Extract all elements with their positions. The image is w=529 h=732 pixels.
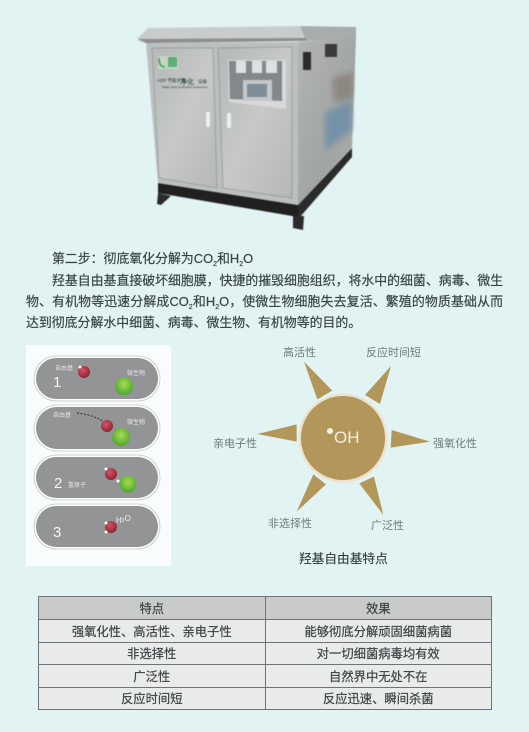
- step 1 pill: 微生物: [127, 369, 145, 377]
- chart: hydroxyl radical sun diagram: [213, 345, 477, 566]
- paragraph: hydroxyl radical action: 物、有机物等迅速分解成CO2和H2O，使微生物细胞失去复活、繁殖的物质基础从而: [26, 294, 503, 311]
- heading: step two: 第二步：彻底氧化分解为CO2和H2O: [52, 251, 253, 268]
- table: characteristics and effects: 强氧化性、高活性、亲电子性: [72, 625, 232, 639]
- ray labels: 广泛性: [371, 518, 404, 532]
- ray labels: 反应时间短: [366, 345, 421, 359]
- table: characteristics and effects: 能够彻底分解顽固细菌病菌: [304, 625, 452, 639]
- step 1 pill: 1: [53, 374, 61, 391]
- step 3 pill: 3: [53, 524, 61, 541]
- table: characteristics and effects: 广泛性: [133, 670, 170, 684]
- paragraph: hydroxyl radical action: 达到彻底分解水中细菌、病毒、微生物、有机物等的目的。: [26, 315, 361, 330]
- step 2 pill: 氢原子: [68, 481, 86, 489]
- step 1b pill: 自由基: [53, 411, 71, 419]
- step 3 pill: O: [125, 514, 131, 523]
- step 2 pill: [34, 455, 160, 500]
- equipment photo: stainless steel purification cabinet: 设备: [198, 78, 207, 85]
- step 1 pill: 自由基: [55, 364, 73, 372]
- chart caption: 羟基自由基特点: [299, 552, 388, 566]
- equipment label: ADP 节能水体: [157, 77, 186, 84]
- table: characteristics and effects: [38, 596, 492, 710]
- table: characteristics and effects: 非选择性: [127, 647, 176, 661]
- table: characteristics and effects: 对一切细菌病毒均有效: [317, 647, 440, 661]
- table: characteristics and effects: 特点: [139, 602, 164, 616]
- ray labels: [213, 345, 477, 532]
- step 3 pill: 2: [122, 518, 125, 524]
- ray labels: 高活性: [283, 345, 316, 359]
- step 3 pill: H: [116, 516, 122, 525]
- ray labels: 强氧化性: [433, 436, 477, 450]
- table: characteristics and effects: 反应迅速、瞬间杀菌: [323, 692, 434, 706]
- paragraph: hydroxyl radical action: [26, 273, 503, 330]
- step 1b pill: [34, 405, 160, 451]
- step 1b pill: 微生物: [127, 418, 145, 426]
- ray labels: 亲电子性: [213, 436, 257, 450]
- equipment photo: stainless steel purification cabinet: [138, 26, 356, 231]
- step 1 pill: [34, 356, 160, 401]
- table: characteristics and effects: 效果: [366, 602, 391, 616]
- equipment photo: stainless steel purification cabinet: Water body purification equipment: [162, 85, 208, 89]
- chart: hydroxyl radical sun diagram: OH: [334, 428, 360, 447]
- equipment photo: stainless steel purification cabinet: 净化: [180, 77, 194, 86]
- step 2 pill: 2: [54, 475, 62, 492]
- ray labels: 非选择性: [268, 516, 312, 530]
- table: characteristics and effects: 自然界中无处不在: [329, 670, 427, 684]
- step 3 pill: [34, 504, 160, 549]
- paragraph: hydroxyl radical action: 羟基自由基直接破坏细胞膜，快捷的摧毁细胞组织，将水中的细菌、病毒、微生: [52, 273, 503, 288]
- table: characteristics and effects: 反应时间短: [121, 692, 182, 706]
